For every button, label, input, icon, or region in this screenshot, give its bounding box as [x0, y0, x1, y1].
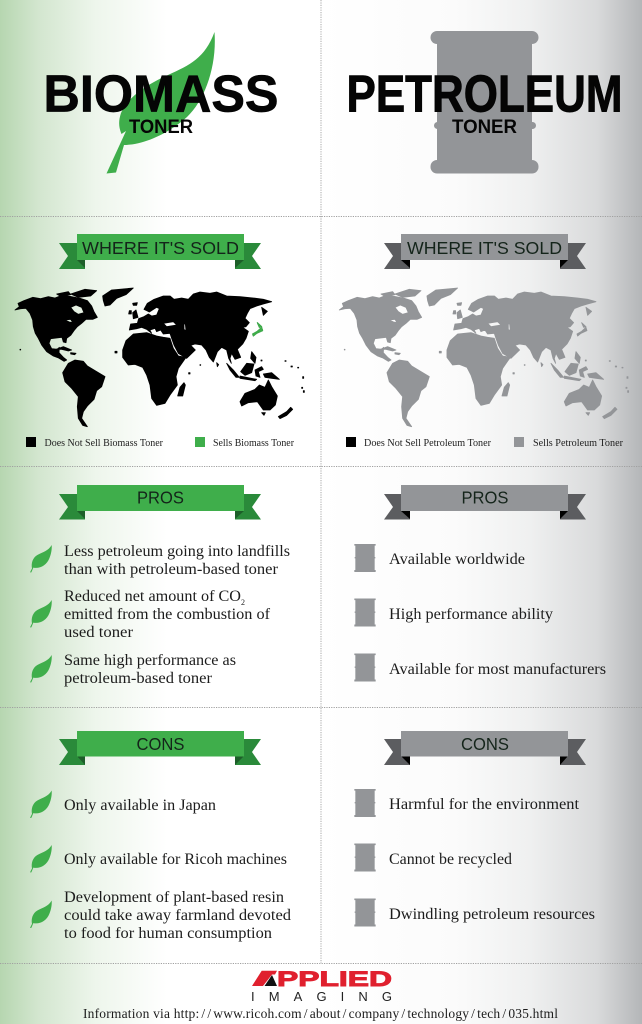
legend: petroleum: Does Not Sell Petroleum Toner [364, 438, 492, 449]
banner: where it's sold, biomass [59, 234, 261, 269]
pros list: biomass [30, 543, 290, 687]
pro item 3 [354, 654, 606, 682]
banner: pros, biomass: PROS [137, 488, 184, 508]
con item 2 [354, 844, 512, 872]
con item 2 [30, 845, 287, 872]
icon: large leaf [106, 32, 215, 174]
right panel background [321, 0, 642, 1024]
pro item 3 [30, 652, 236, 687]
con item 1: Harmful for the environment [389, 796, 580, 813]
subtitle: toner: TONER [129, 117, 193, 138]
legend: biomass: Sells Biomass Toner [213, 438, 295, 449]
pro item 3: Available for most manufacturers [389, 661, 606, 678]
source credit: Information via http://www.ricoh.com/about/company/technology/tech/035.html [83, 1006, 558, 1021]
con item 3: could take away farmland devoted [64, 907, 291, 924]
con item 1 [354, 789, 580, 817]
logo word: applied: PPLIED [277, 968, 392, 991]
pro item 1 [354, 544, 525, 572]
pro item 2: 2 [241, 598, 245, 607]
con item 3 [354, 898, 595, 926]
pro item 3: petroleum-based toner [64, 670, 213, 687]
pros list: petroleum [354, 544, 606, 682]
con item 3: to food for human consumption [64, 925, 272, 942]
con item 3: Dwindling petroleum resources [389, 906, 595, 923]
left panel background [0, 0, 321, 1024]
pro item 2 [354, 598, 553, 626]
cons list: biomass [30, 790, 291, 942]
pro item 2: High performance ability [389, 606, 553, 623]
con item 1: Only available in Japan [64, 797, 216, 814]
pro item 3: Same high performance as [64, 652, 236, 669]
banner: pros, petroleum [384, 485, 586, 520]
banner: cons, biomass: CONS [136, 734, 184, 754]
banner: where it's sold, biomass: WHERE IT'S SOLD [82, 238, 239, 258]
legend: biomass: Does Not Sell Biomass Toner [44, 438, 164, 449]
legend: petroleum [346, 437, 624, 449]
banner: cons, petroleum: CONS [461, 734, 509, 754]
pro item 2: Reduced net amount of CO [64, 588, 241, 605]
banner: cons, biomass [59, 731, 261, 765]
petroleum header [346, 31, 622, 174]
pro item 1: than with petroleum-based toner [64, 561, 279, 578]
pro item 2: used toner [64, 624, 134, 641]
pro item 1: Less petroleum going into landfills [64, 543, 290, 560]
cons list: petroleum [354, 789, 595, 926]
icon: oil barrel [430, 31, 538, 174]
logo: applied imaging [251, 968, 392, 1004]
pro item 1: Available worldwide [389, 551, 525, 568]
legend: petroleum: Sells Petroleum Toner [533, 438, 624, 449]
con item 3 [30, 889, 291, 942]
world map: petroleum [339, 288, 629, 427]
con item 3: Development of plant-based resin [64, 889, 284, 906]
japan highlight [253, 323, 263, 336]
biomass header [44, 32, 278, 174]
banner: pros, petroleum: PROS [462, 488, 508, 508]
banner: cons, petroleum [384, 731, 586, 765]
subtitle: toner: TONER [452, 117, 517, 138]
world map: biomass [15, 288, 304, 427]
con item 1 [30, 790, 216, 818]
banner: pros, biomass [59, 485, 261, 520]
con item 2: Cannot be recycled [389, 851, 512, 868]
title: biomass: BIOMASS [44, 66, 278, 124]
pro item 1 [30, 543, 290, 578]
logo word: imaging: IMAGING [251, 989, 392, 1004]
logo mark: stylized A [252, 971, 277, 986]
banner: where it's sold, petroleum [384, 234, 586, 269]
pro item 2 [30, 588, 271, 641]
banner: where it's sold, petroleum: WHERE IT'S SOLD [407, 238, 562, 258]
legend: biomass [26, 437, 295, 449]
pro item 2: emitted from the combustion of [64, 606, 271, 623]
con item 2: Only available for Ricoh machines [64, 851, 287, 868]
